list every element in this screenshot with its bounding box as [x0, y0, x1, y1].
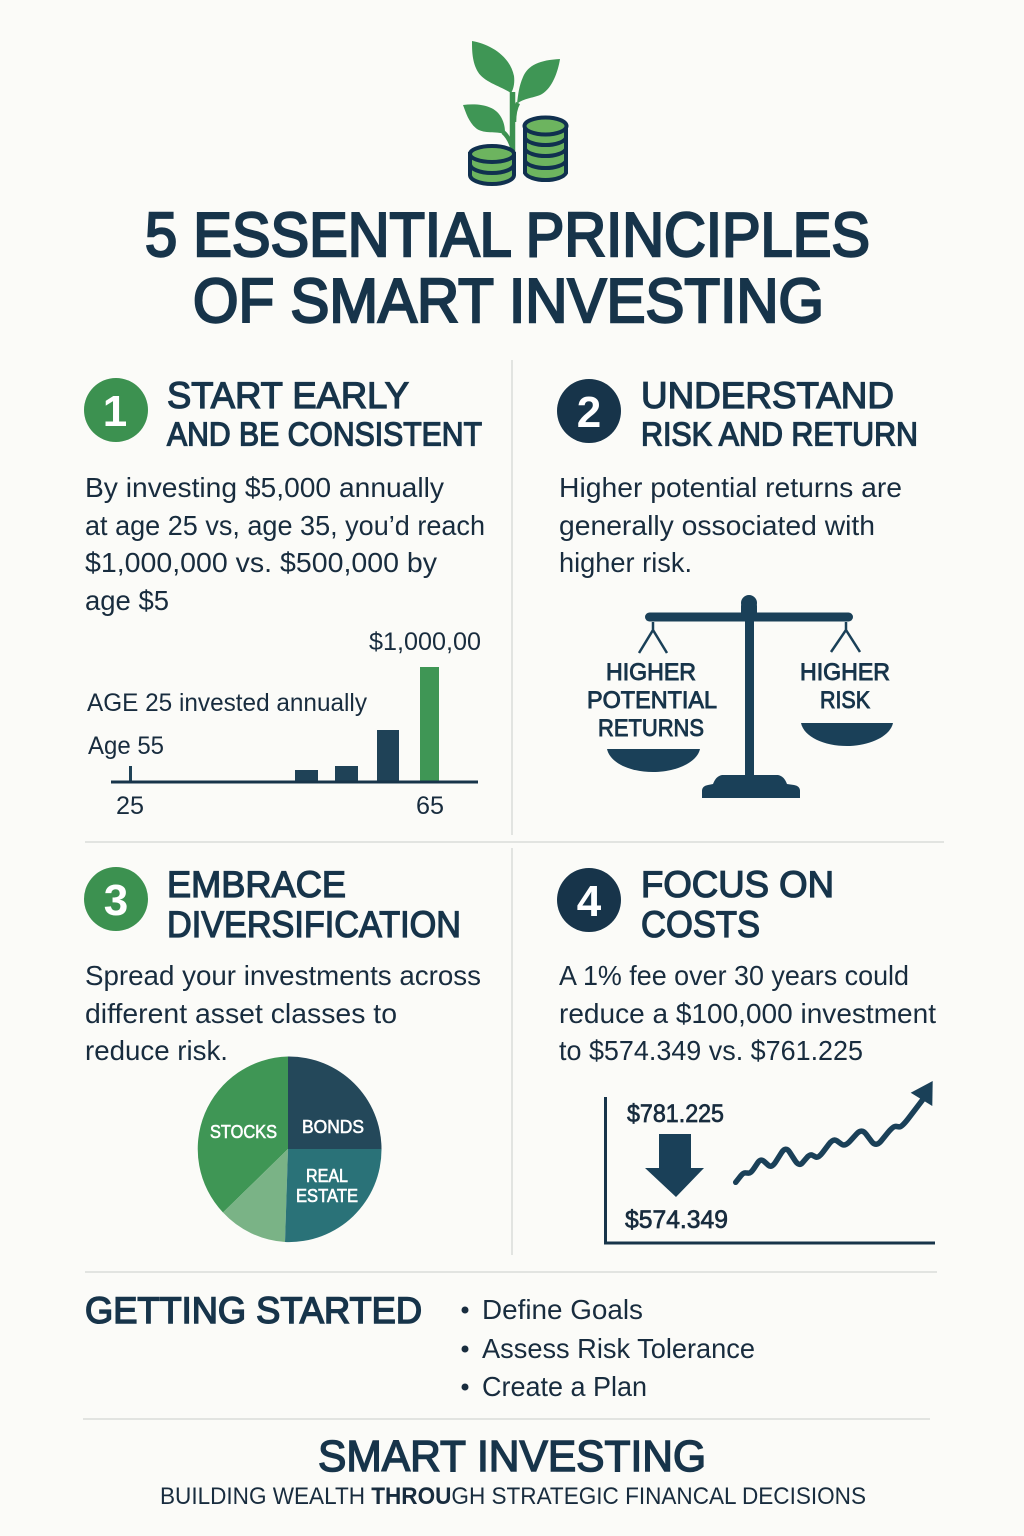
number badge 3 [84, 867, 148, 931]
icon: balance scale: RISK [820, 687, 870, 714]
pie chart: asset allocation [198, 1056, 382, 1242]
bar chart: growth by age: $1,000,00 [369, 628, 481, 656]
body text: age $5 [85, 585, 169, 616]
heading: understand risk and return: UNDERSTAND [641, 375, 894, 416]
body text: reduce a $100,000 investment [559, 998, 936, 1029]
title: 5 ESSENTIAL PRINCIPLES [145, 201, 870, 270]
icon: balance scale: POTENTIAL [587, 687, 717, 714]
checklist: Assess Risk Tolerance [482, 1333, 755, 1364]
panel: focus on costs [557, 864, 936, 1243]
heading: start early: START EARLY [167, 375, 409, 416]
body text [85, 960, 481, 1066]
heading: embrace diversification [167, 864, 461, 945]
line chart: fee impact [606, 1081, 935, 1243]
body text: different asset classes to [85, 998, 397, 1029]
heading: embrace diversification: EMBRACE [167, 864, 346, 905]
heading: start early [167, 375, 482, 452]
panel: start early [84, 375, 485, 820]
bar chart: growth by age: 65 [416, 792, 444, 820]
number badge 1 [84, 378, 148, 442]
body text: reduce risk. [85, 1035, 228, 1066]
pie chart: asset allocation: ESTATE [296, 1186, 358, 1206]
icon: plant growing from coin stacks [463, 41, 566, 184]
icon: balance scale: HIGHER [606, 659, 696, 686]
number badge 2 [557, 379, 621, 443]
checklist [462, 1294, 755, 1402]
bar chart: growth by age [87, 628, 481, 820]
icon: balance scale: RETURNS [598, 715, 704, 742]
title: OF SMART INVESTING [193, 267, 824, 336]
title [145, 201, 870, 336]
footer: SMART INVESTING [318, 1432, 706, 1481]
body text: higher risk. [559, 547, 692, 578]
number badge 1: 1 [103, 387, 127, 436]
footer [160, 1432, 866, 1510]
footer: BUILDING WEALTH THROUGH STRATEGIC FINANCAL DECISIONS [160, 1483, 866, 1510]
number badge 3: 3 [104, 876, 128, 925]
pie chart: asset allocation: REAL [306, 1166, 348, 1186]
icon: balance scale: HIGHER [800, 659, 890, 686]
checklist: Define Goals [482, 1294, 643, 1325]
number badge 4: 4 [577, 877, 602, 926]
body text: By investing $5,000 annually [85, 472, 444, 503]
body text [559, 960, 936, 1066]
body text: to $574.349 vs. $761.225 [559, 1035, 863, 1066]
panel: getting started [85, 1290, 755, 1402]
heading: start early: AND BE CONSISTENT [167, 416, 482, 452]
body text [85, 472, 485, 616]
heading: understand risk and return [641, 375, 918, 452]
heading: focus on costs: FOCUS ON [641, 864, 834, 905]
body text: $1,000,000 vs. $500,000 by [85, 547, 437, 578]
line chart: fee impact: $574.349 [625, 1206, 728, 1234]
line chart: fee impact: $781.225 [627, 1100, 724, 1128]
pie chart: asset allocation: STOCKS [210, 1122, 277, 1142]
number badge 2: 2 [577, 388, 601, 437]
number badge 4 [557, 868, 621, 932]
heading: embrace diversification: DIVERSIFICATION [167, 904, 461, 945]
heading: understand risk and return: RISK AND RETURN [641, 416, 918, 452]
body text: at age 25 vs, age 35, you’d reach [85, 510, 485, 541]
bar chart: growth by age: 25 [116, 792, 144, 820]
checklist: Create a Plan [482, 1371, 647, 1402]
panel: embrace diversification [84, 864, 481, 1242]
pie chart: asset allocation: BONDS [302, 1117, 364, 1137]
bar chart: growth by age: AGE 25 invested annually [87, 689, 367, 717]
heading: focus on costs: COSTS [641, 904, 760, 945]
panel: understand risk and return [557, 375, 918, 798]
body text: A 1% fee over 30 years could [559, 960, 909, 991]
heading: focus on costs [641, 864, 834, 945]
bar chart: growth by age: Age 55 [88, 732, 164, 760]
body text: Higher potential returns are [559, 472, 902, 503]
body text: generally ossociated with [559, 510, 875, 541]
heading: getting started: GETTING STARTED [85, 1290, 422, 1331]
body text [559, 472, 902, 578]
body text: Spread your investments across [85, 960, 481, 991]
icon: balance scale [587, 595, 893, 798]
